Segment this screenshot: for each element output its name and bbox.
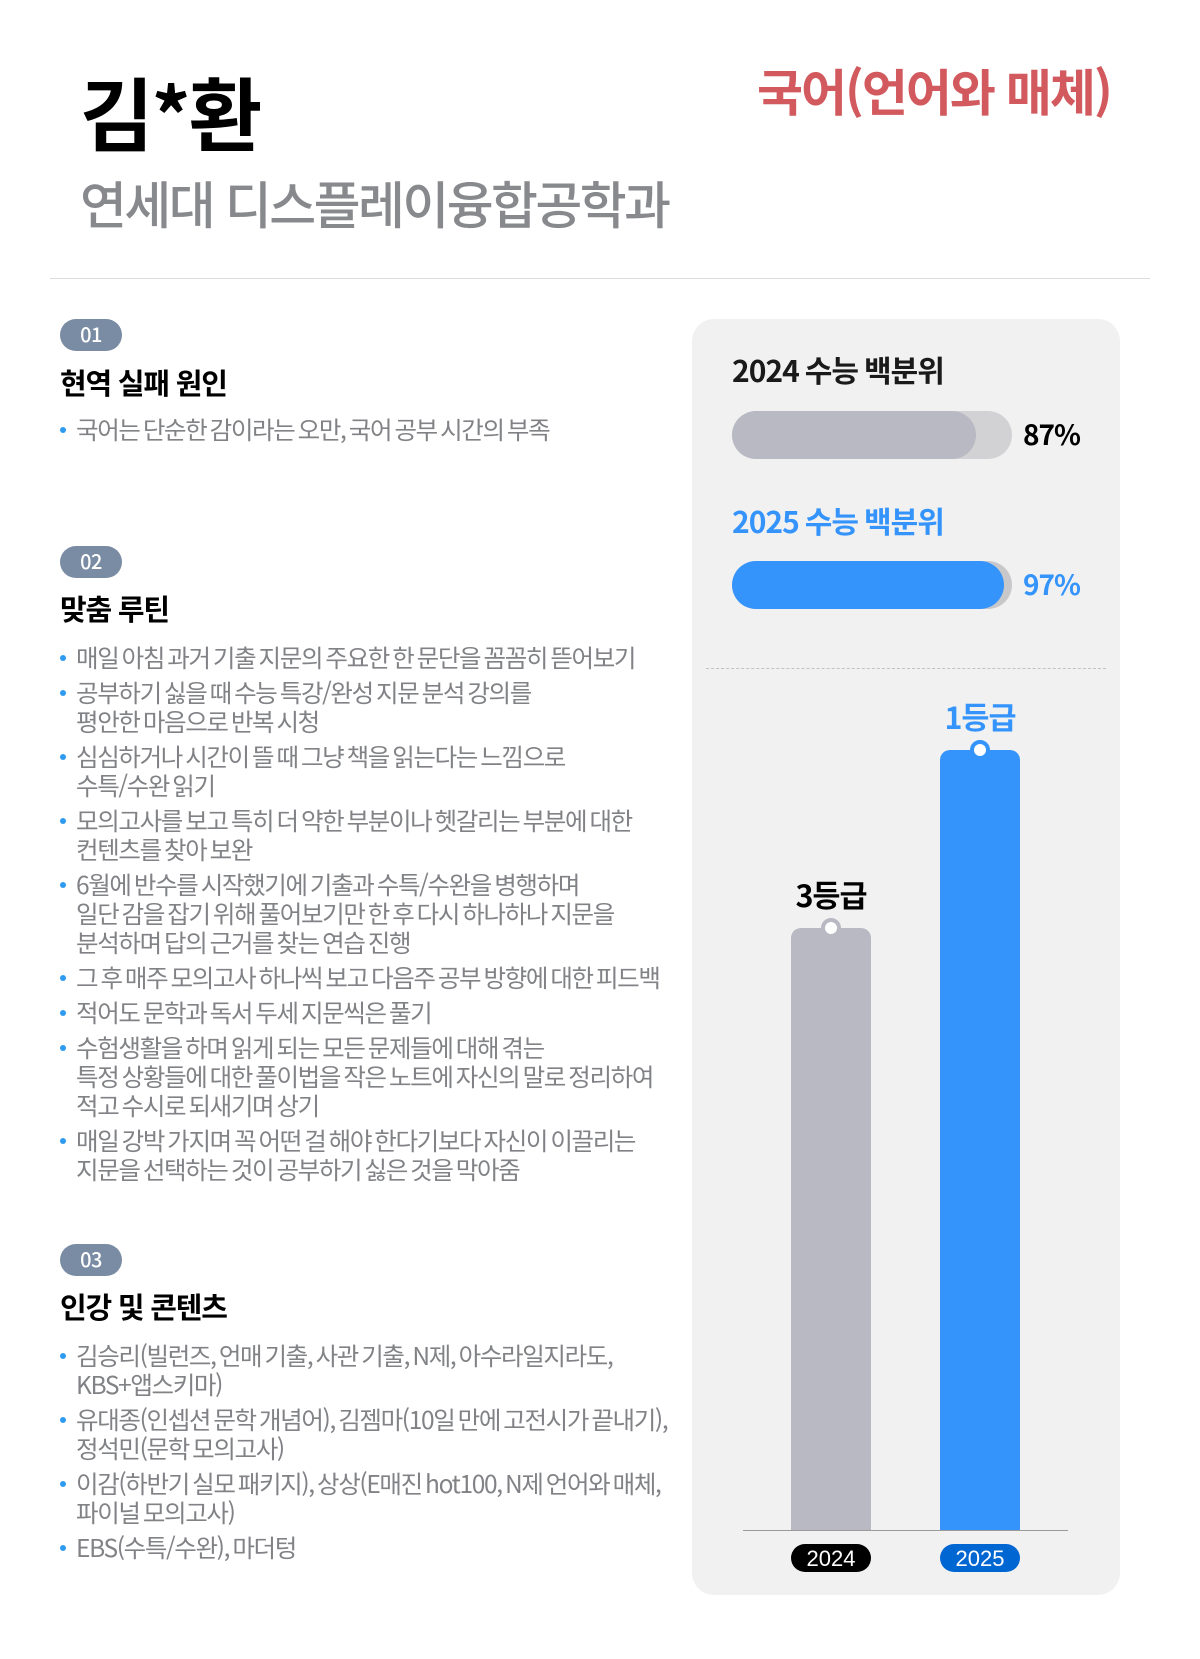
2025 bar fill bbox=[732, 561, 1004, 609]
section 01 number badge: 01 bbox=[80, 319, 102, 348]
section 02 bullet list: 수험생활을 하며 읽게 되는 모든 문제들에 대해 겪는 bbox=[76, 1030, 544, 1065]
section 03 bullet list: 김승리(빌런즈, 언매 기출, 사관 기출, N제, 아수라일지라도, bbox=[76, 1338, 612, 1373]
2024 percentile heading: 2024 수능 백분위 bbox=[732, 347, 944, 391]
section 01 heading: 현역 실패 원인 bbox=[60, 361, 227, 403]
2024 grade label: 3등급 bbox=[795, 872, 867, 916]
section 02 bullet list: 적고 수시로 되새기며 상기 bbox=[76, 1088, 319, 1123]
panel: score charts bbox=[692, 319, 1120, 1595]
2025 percentile bar bbox=[732, 561, 1012, 609]
section 03 bullet list: 파이널 모의고사) bbox=[76, 1495, 235, 1530]
subtitle: university and department: 연세대 디스플레이융합공학과 bbox=[80, 165, 669, 239]
2024 bar fill bbox=[732, 411, 976, 459]
section 03 bullet list: 유대종(인셉션 문학 개념어), 김젬마(10일 만에 고전시가 끝내기), bbox=[76, 1402, 667, 1437]
section 02 bullet list: 그 후 매주 모의고사 하나씩 보고 다음주 공부 방향에 대한 피드백 bbox=[76, 960, 660, 995]
2025 year badge: 2025 bbox=[956, 1546, 1004, 1571]
2024 percentile bar bbox=[732, 411, 1012, 459]
title: student name: 김*환 bbox=[80, 53, 260, 169]
2024 grade bar bbox=[791, 928, 871, 1530]
2024 percentile value: 87% bbox=[1023, 414, 1080, 454]
2025 bar marker bbox=[970, 740, 990, 760]
section 02 bullet list: 평안한 마음으로 반복 시청 bbox=[76, 704, 319, 739]
section 01 number badge bbox=[60, 319, 122, 351]
2024 year badge bbox=[791, 1544, 871, 1572]
section 02 bullet list: 모의고사를 보고 특히 더 약한 부분이나 헷갈리는 부분에 대한 bbox=[76, 803, 632, 838]
section 03 bullet list: EBS(수특/수완), 마더텅 bbox=[76, 1530, 296, 1565]
section 02 bullet list: 매일 강박 가지며 꼭 어떤 걸 해야 한다기보다 자신이 이끌리는 bbox=[76, 1123, 635, 1158]
section 02 bullet list: 매일 아침 과거 기출 지문의 주요한 한 문단을 꼼꼼히 뜯어보기 bbox=[76, 640, 635, 675]
section 02 bullet list: 적어도 문학과 독서 두세 지문씩은 풀기 bbox=[76, 995, 431, 1030]
2025 year badge bbox=[940, 1544, 1020, 1572]
section 03 heading: 인강 및 콘텐츠 bbox=[60, 1285, 227, 1327]
2025 grade bar bbox=[940, 750, 1020, 1530]
section 03 bullet list: 정석민(문학 모의고사) bbox=[76, 1431, 284, 1466]
section 02 bullet list: 수특/수완 읽기 bbox=[76, 768, 215, 803]
2025 grade label: 1등급 bbox=[944, 694, 1016, 738]
section 02 bullet list: 지문을 선택하는 것이 공부하기 싫은 것을 막아줌 bbox=[76, 1152, 519, 1187]
subject label: 국어(언어와 매체) bbox=[757, 54, 1111, 126]
section 02 bullet list bbox=[60, 640, 660, 1187]
section 02 bullet list: 컨텐츠를 찾아 보완 bbox=[76, 832, 252, 867]
section 02 bullet list: 분석하며 답의 근거를 찾는 연습 진행 bbox=[76, 925, 410, 960]
section 02 bullet list: 공부하기 싫을 때 수능 특강/완성 지문 분석 강의를 bbox=[76, 675, 531, 710]
bar chart: grades bbox=[743, 694, 1068, 1572]
section 02 bullet list: 특정 상황들에 대한 풀이법을 작은 노트에 자신의 말로 정리하여 bbox=[76, 1059, 653, 1094]
2025 percentile value: 97% bbox=[1023, 564, 1080, 604]
section 03 bullet list bbox=[60, 1338, 668, 1565]
section 02 bullet list: 심심하거나 시간이 뜰 때 그냥 책을 읽는다는 느낌으로 bbox=[76, 739, 565, 774]
section 03 number badge bbox=[60, 1244, 122, 1276]
section 02 number badge bbox=[60, 546, 122, 578]
section 03 bullet list: KBS+앱스키마) bbox=[76, 1367, 222, 1402]
2025 percentile heading: 2025 수능 백분위 bbox=[732, 498, 944, 542]
section 03 bullet list: 이감(하반기 실모 패키지), 상상(E매진 hot100, N제 언어와 매체, bbox=[76, 1466, 660, 1501]
section 03 number badge: 03 bbox=[80, 1244, 102, 1273]
2024 year badge: 2024 bbox=[807, 1546, 855, 1571]
section 02 bullet list: 일단 감을 잡기 위해 풀어보기만 한 후 다시 하나하나 지문을 bbox=[76, 896, 614, 931]
section 02 number badge: 02 bbox=[80, 546, 102, 575]
2024 bar marker bbox=[821, 918, 841, 938]
section 01 bullet list: 국어는 단순한 감이라는 오만, 국어 공부 시간의 부족 bbox=[76, 412, 549, 447]
section 02 bullet list: 6월에 반수를 시작했기에 기출과 수특/수완을 병행하며 bbox=[76, 867, 579, 902]
section 02 heading: 맞춤 루틴 bbox=[60, 587, 169, 629]
